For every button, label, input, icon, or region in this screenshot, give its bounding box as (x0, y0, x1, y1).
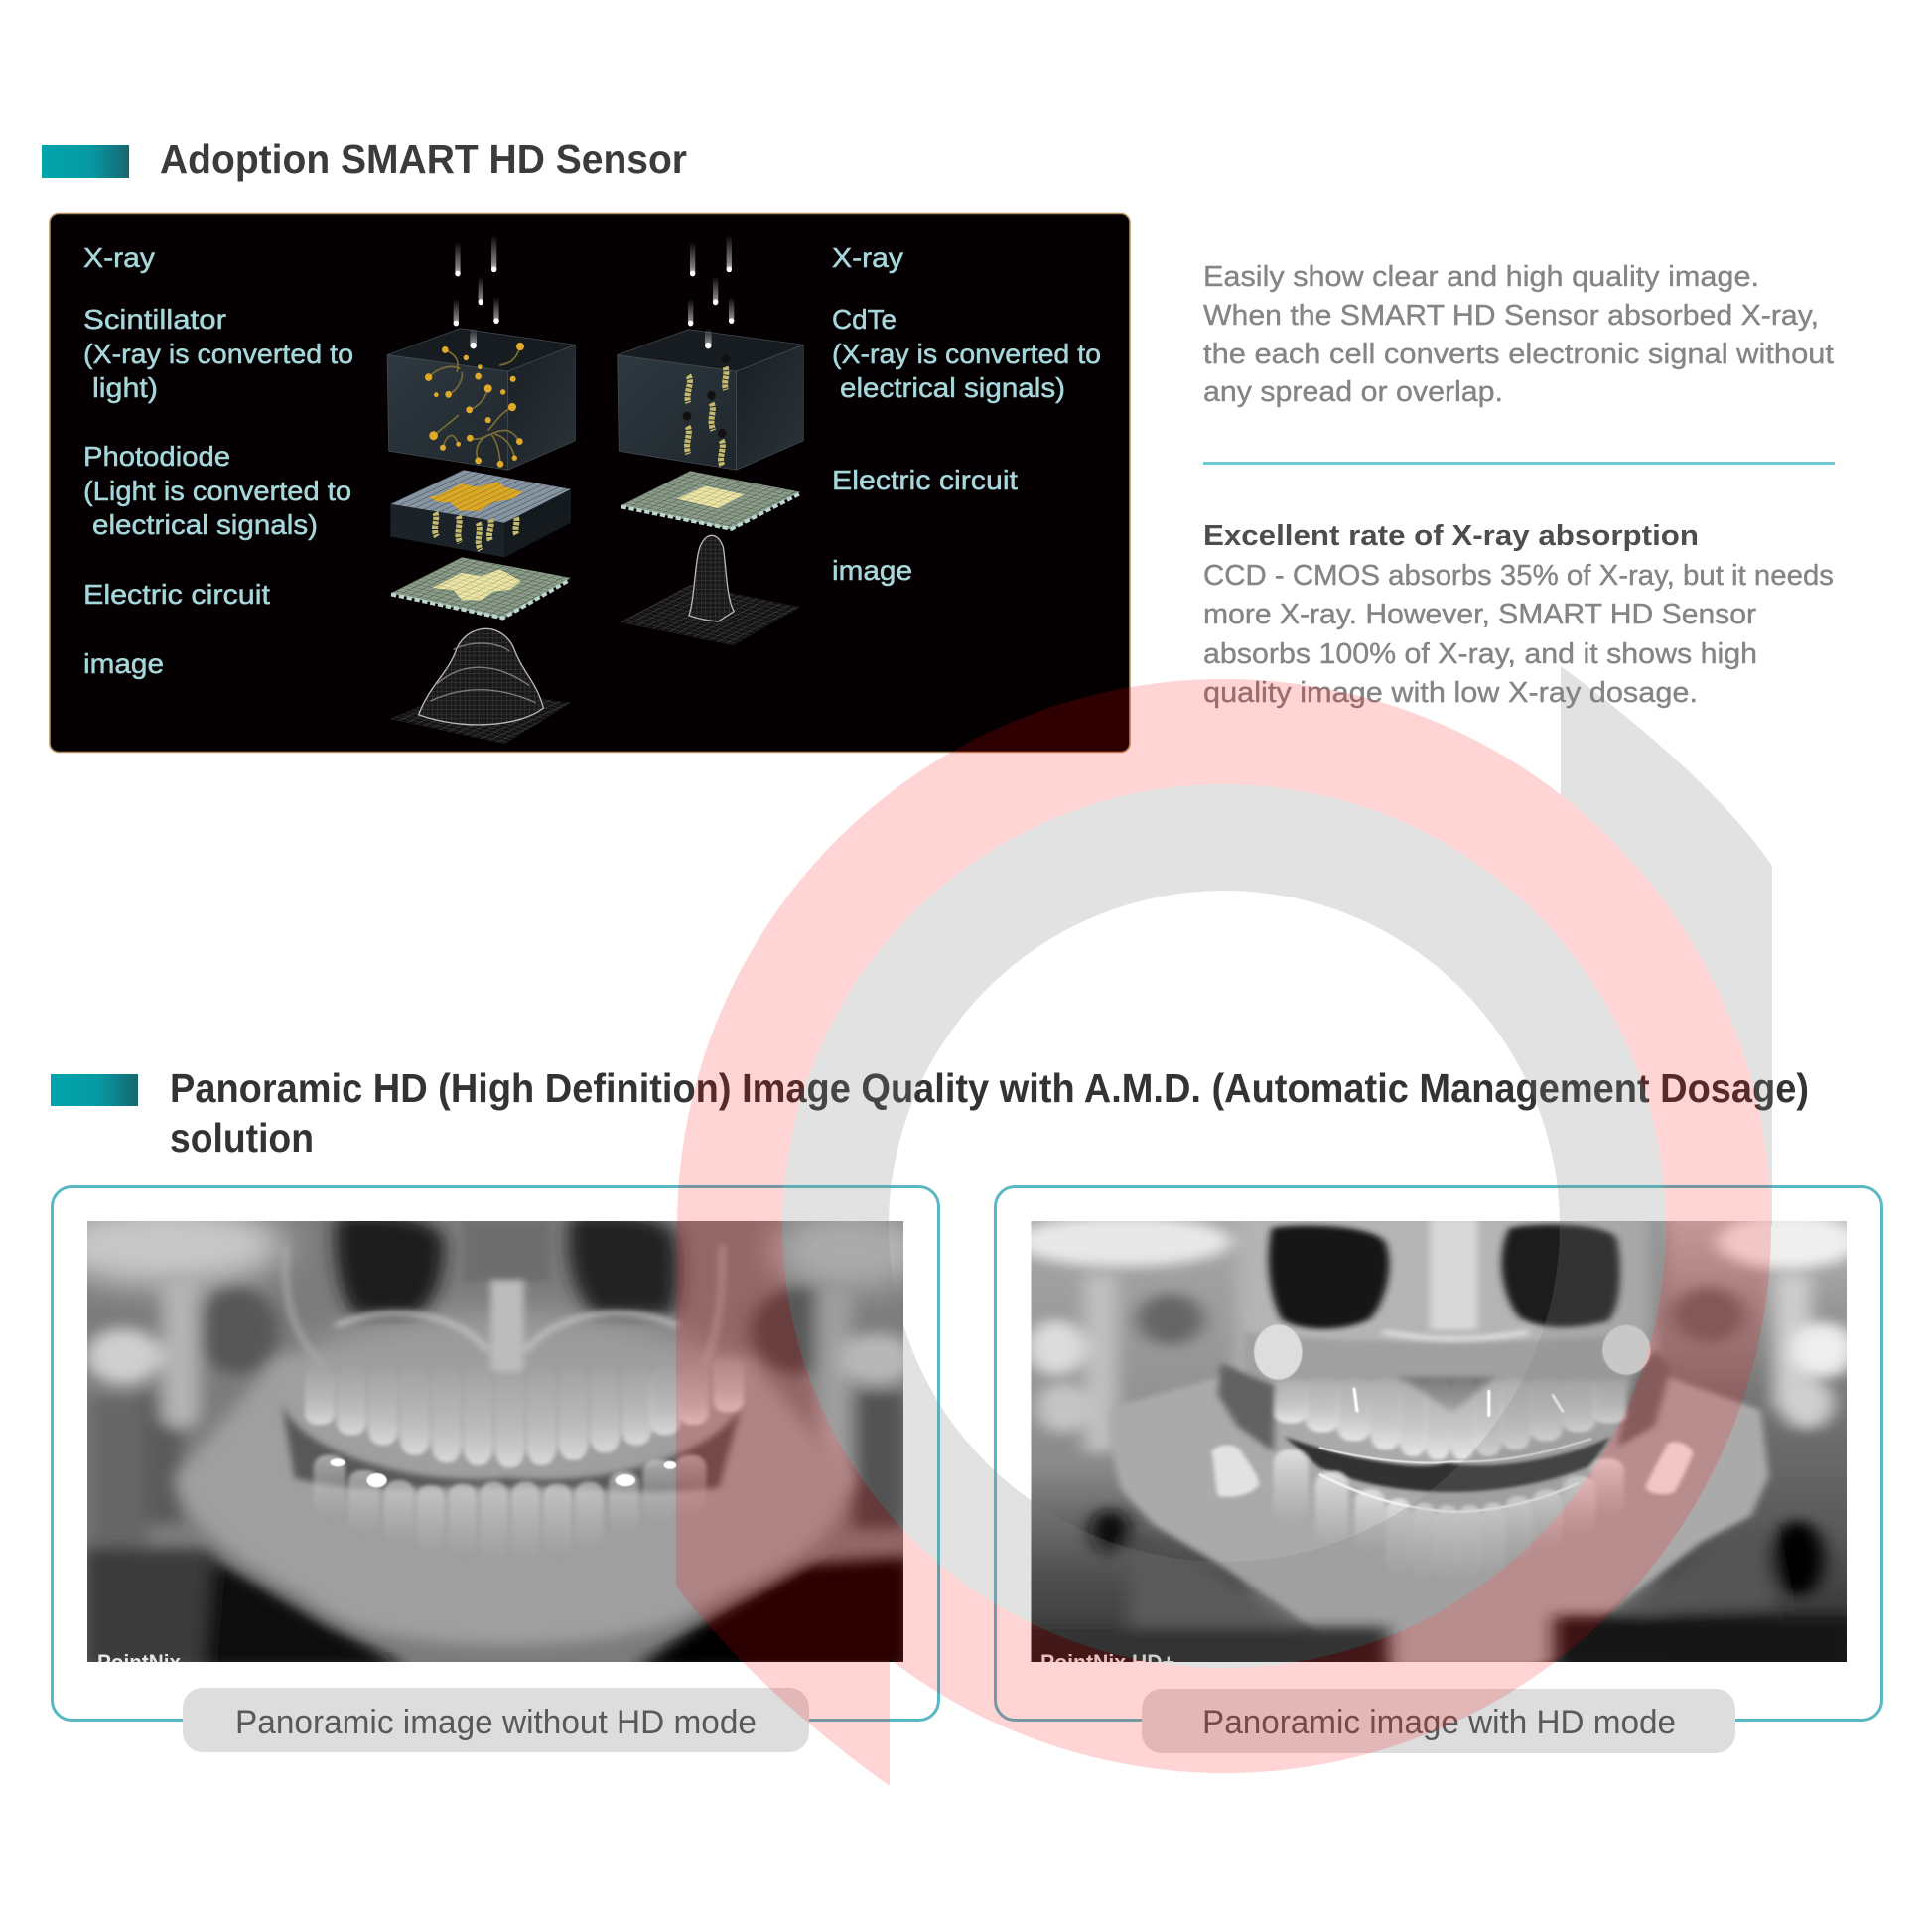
x-ray drops (454, 235, 734, 348)
circuit layer: scintillator stack (390, 557, 571, 619)
caption pill: without HD (183, 1688, 809, 1752)
scintillator light scatter (429, 346, 520, 464)
text block: sensor description: any spread or overlap. (1203, 376, 1503, 408)
x-ray: without HD (87, 1221, 903, 1662)
heading: Adoption SMART HD Sensor: Adoption SMART HD Sensor (160, 136, 687, 182)
left column labels: (X-ray is converted to (83, 339, 353, 369)
left column labels: X-ray (83, 242, 155, 273)
text block: X-ray absorption (1203, 520, 1834, 709)
left column labels: (Light is converted to (83, 476, 351, 506)
right column labels: electrical signals) (840, 372, 1065, 403)
CdTe charge tracks (687, 367, 726, 466)
right column labels (832, 242, 1101, 586)
diagram: scintillator stack and CdTe stack (387, 235, 803, 744)
text block: X-ray absorption: more X-ray. However, SMART HD Sensor (1203, 599, 1756, 630)
left column labels: light) (92, 372, 158, 403)
heading: Panoramic HD image quality: solution (170, 1115, 314, 1161)
caption pill: without HD: Panoramic image without HD mode (235, 1704, 757, 1741)
left column labels: Scintillator (83, 304, 226, 335)
image: wide signal peak (390, 687, 571, 744)
right column labels: CdTe (832, 304, 897, 335)
text block: X-ray absorption: CCD - CMOS absorbs 35% of X-ray, but it needs (1203, 560, 1834, 592)
circuit layer: CdTe stack (621, 471, 800, 530)
right column labels: (X-ray is converted to (832, 339, 1101, 369)
left column labels: Photodiode (83, 441, 230, 472)
text block: sensor description: Easily show clear and high quality image. (1203, 261, 1759, 293)
photodiode gold cells (429, 482, 523, 511)
right column labels: X-ray (832, 242, 903, 273)
right column labels: image (832, 555, 912, 586)
x-ray: without HD: PointNix (97, 1650, 182, 1675)
panel: panoramic image with HD mode (995, 1187, 1882, 1753)
right column labels: Electric circuit (832, 465, 1018, 495)
text block: sensor description: the each cell converts electronic signal without (1203, 339, 1834, 370)
heading: Panoramic HD image quality: Panoramic HD (High Definition) Image Quality with A.M.D. (Automatic Management Dosage) (170, 1065, 1809, 1111)
caption pill: with HD: Panoramic image with HD mode (1202, 1704, 1676, 1741)
CdTe box (618, 330, 803, 470)
text block: sensor description (1203, 261, 1834, 408)
text block: sensor description: When the SMART HD Sensor absorbed X-ray, (1203, 300, 1819, 332)
watermark: gray ring and tail (782, 666, 1772, 1668)
left column labels: electrical signals) (92, 509, 318, 540)
panel: panoramic image without HD mode (45, 1187, 939, 1752)
watermark: pink ring and tail (676, 679, 1771, 1786)
text block: X-ray absorption: Excellent rate of X-ray absorption (1203, 520, 1699, 552)
photodiode layer (390, 504, 504, 557)
scintillator box (387, 329, 575, 470)
left column labels: image (83, 648, 164, 679)
left column labels (83, 242, 353, 679)
image: narrow signal peak (621, 585, 801, 645)
text block: X-ray absorption: quality image with low X-ray dosage. (1203, 677, 1698, 709)
x-ray: with HD (1031, 1221, 1847, 1662)
panel: sensor diagram (50, 214, 1130, 753)
left column labels: Electric circuit (83, 579, 270, 610)
caption pill: with HD (1142, 1689, 1735, 1753)
x-ray: with HD: PointNix HD+ (1040, 1650, 1174, 1675)
text block: X-ray absorption: absorbs 100% of X-ray, and it shows high (1203, 638, 1757, 670)
heading: Panoramic HD image quality (51, 1065, 1809, 1161)
